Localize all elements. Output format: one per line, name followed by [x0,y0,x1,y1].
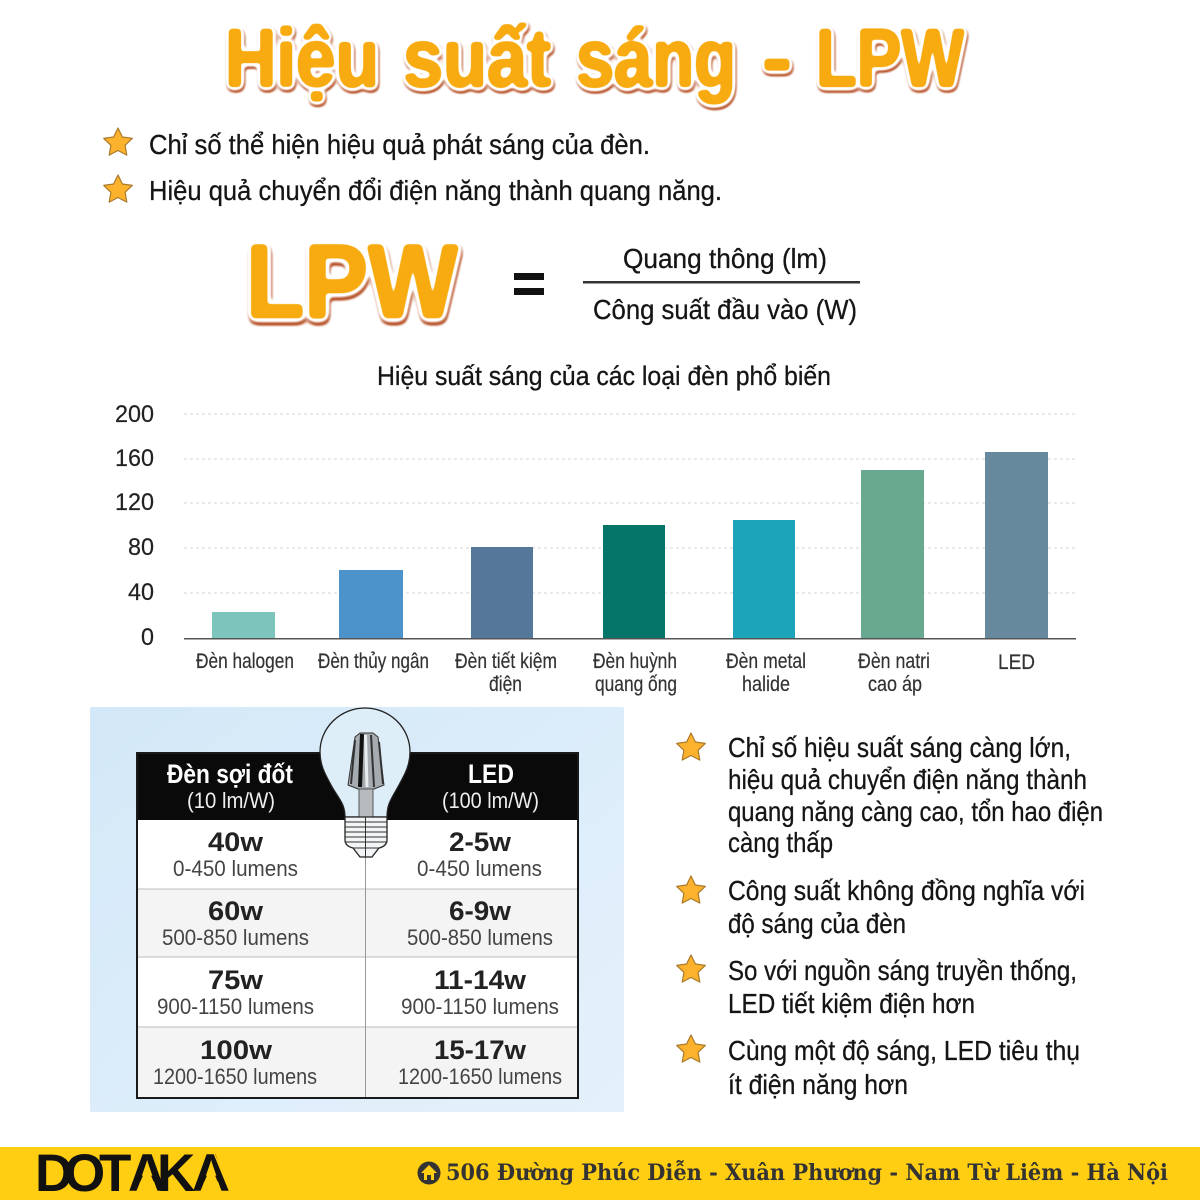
table body [137,753,578,1098]
note 2 [728,875,1085,939]
category labels: LED [998,651,1035,674]
row 2: 6-9w [449,896,512,926]
numerator: Quang thông (lm) [623,243,827,274]
icon: star [677,1035,705,1062]
row 2: 500-850 lumens [162,925,309,950]
icon: star [677,733,705,760]
LPW heading: LPW [246,224,459,340]
icon: star [104,128,132,155]
row 3: 75w [208,965,264,995]
title: sáng [576,13,736,104]
header: incandescent [167,759,293,813]
bars [212,452,1048,638]
y axis labels: 0 [141,624,154,651]
note 1: Chỉ số hiệu suất sáng càng lớn, [728,732,1071,763]
category labels: Đèn halogen [196,650,294,673]
row 4: 15-17w [434,1035,527,1065]
header: LED: LED [468,759,514,789]
row 1: 0-450 lumens [173,856,298,881]
note 4: ít điện năng hơn [728,1069,908,1100]
row 3: 900-1150 lumens [157,994,314,1019]
row 4 [153,1035,562,1089]
note 1: quang năng càng cao, tổn hao điện [728,796,1103,827]
bullet text 1: Chỉ số thể hiện hiệu quả phát sáng của đèn. [149,129,650,160]
category labels: Đèn huỳnh [593,650,677,673]
y axis labels: 80 [128,534,154,561]
category labels: Đèn natri [858,650,930,673]
address: 506 Đường Phúc Diễn - Xuân Phương - Nam Từ Liêm - Hà Nội [446,1159,1168,1186]
intro bullets [104,128,722,206]
header: incandescent: (10 lm/W) [187,788,275,813]
note 1: hiệu quả chuyển điện năng thành [728,764,1087,795]
note 4: Cùng một độ sáng, LED tiêu thụ [728,1035,1080,1066]
row 1: 0-450 lumens [417,856,542,881]
category labels: Đèn thủy ngân [318,650,429,673]
row 2: 60w [208,896,264,926]
bar chart [115,401,1076,696]
note 3 [728,955,1077,1019]
fraction line [583,281,860,284]
icon: light bulb [320,708,410,857]
category labels: Đèn tiết kiệm [455,650,557,673]
category labels: điện [489,673,522,696]
row 1: 40w [208,827,264,857]
icon: star [677,955,705,982]
header: LED [442,759,539,813]
icon: star [104,175,132,202]
y axis labels [115,401,154,651]
row 1 [173,827,542,881]
title [225,13,964,104]
row 4: 1200-1650 lumens [398,1064,562,1089]
row 3: 11-14w [434,965,527,995]
row 1: 2-5w [449,827,512,857]
row 3: 900-1150 lumens [401,994,559,1019]
note 2: độ sáng của đèn [728,908,906,939]
note 3: LED tiết kiệm điện hơn [728,988,975,1019]
row 4: 1200-1650 lumens [153,1064,317,1089]
category labels: Đèn metal [726,650,806,673]
header: incandescent: Đèn sợi đốt [167,759,293,789]
note 1: càng thấp [728,827,833,858]
title: LPW [816,13,964,104]
row 2 [162,896,553,950]
note 1 [728,732,1103,858]
note 3: So với nguồn sáng truyền thống, [728,955,1077,986]
title: - [762,13,792,104]
chart title: Hiệu suất sáng của các loại đèn phổ biến [377,361,831,391]
note 2: Công suất không đồng nghĩa với [728,875,1085,906]
row 2: 500-850 lumens [407,925,553,950]
title: suất [403,13,551,104]
bullet text 2: Hiệu quả chuyển đổi điện năng thành quang năng. [149,175,722,206]
panel: comparison table [90,707,624,1112]
note 4 [728,1035,1080,1100]
category labels: cao áp [868,673,922,696]
y axis labels: 40 [128,579,154,606]
row 4: 100w [200,1035,273,1065]
y axis labels: 200 [115,401,154,428]
footer bar [0,1144,1200,1200]
category labels: halide [742,673,790,696]
equals sign [514,273,544,295]
formula [246,224,860,340]
title: Hiệu [225,13,379,104]
notes list [677,732,1103,1100]
category labels [196,650,1035,696]
category labels: quang ống [595,673,677,696]
y axis labels: 120 [115,489,154,516]
icon: home [418,1162,440,1184]
y axis labels: 160 [115,445,154,472]
denominator: Công suất đầu vào (W) [593,294,857,325]
icon: star [677,876,705,903]
row 3 [157,965,559,1019]
header: LED: (100 lm/W) [442,788,539,813]
